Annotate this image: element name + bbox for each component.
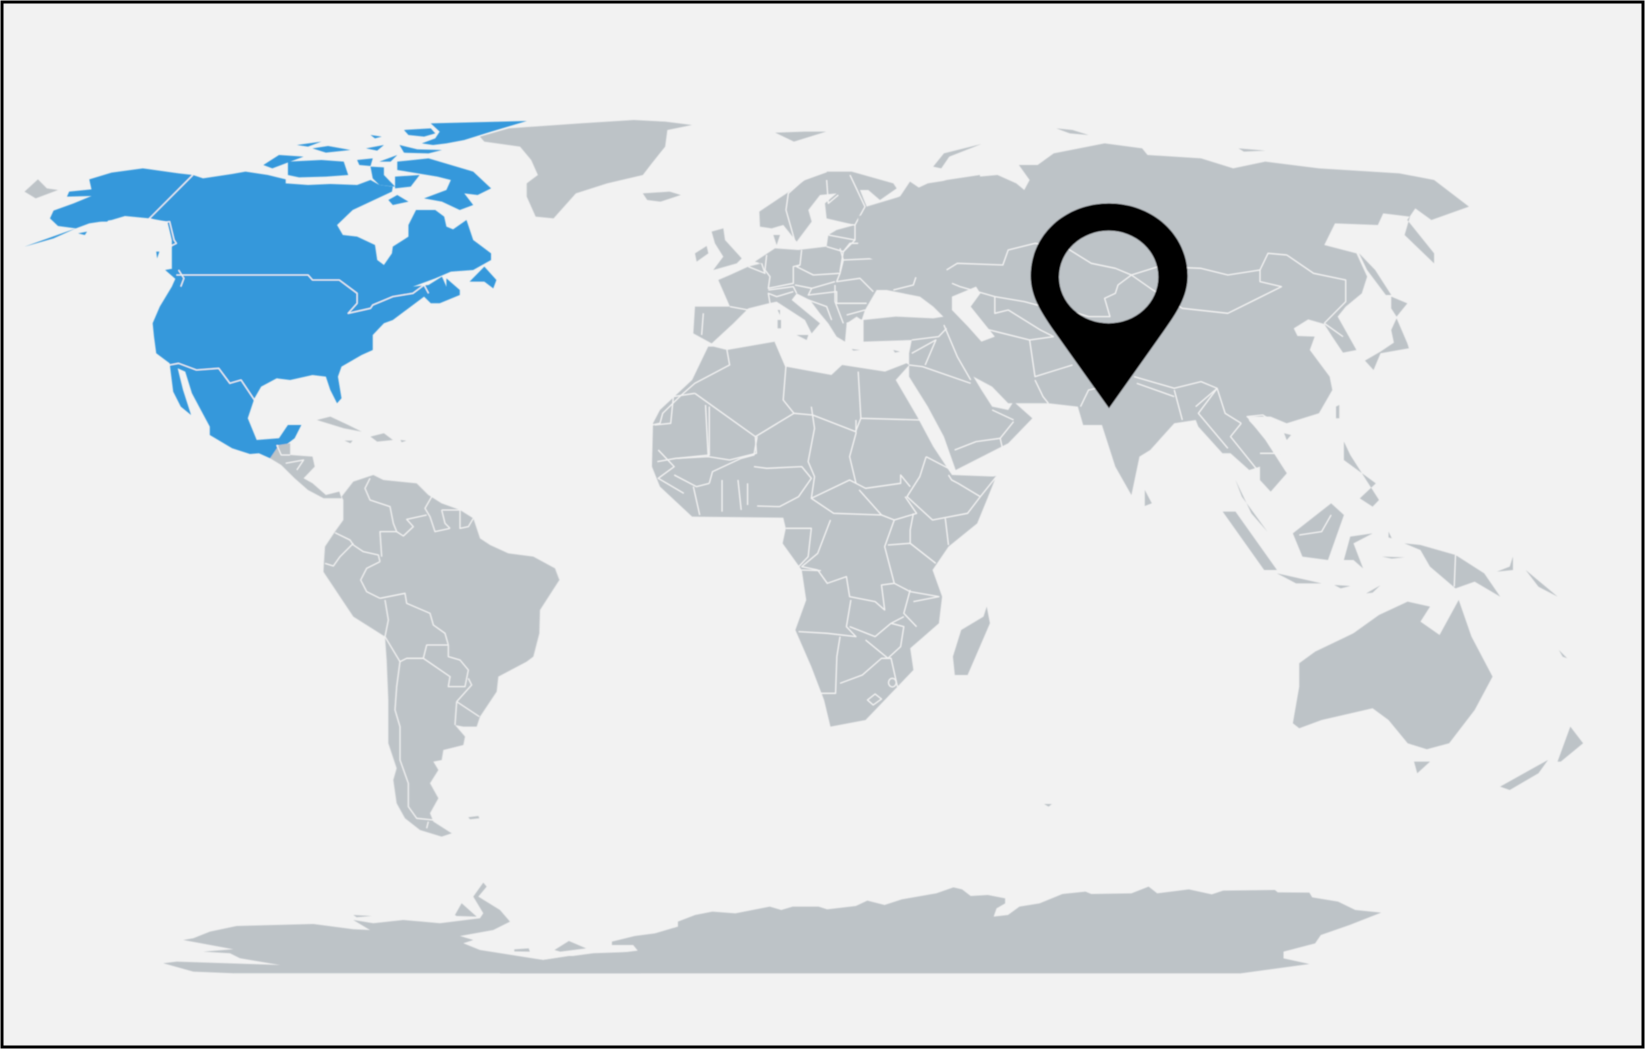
map: highlighted North America xyxy=(25,121,527,458)
inland sea: Caspian xyxy=(952,287,995,342)
map: Southeast Asia, Australia and Oceania xyxy=(1044,442,1583,807)
mainland Canada, USA, Mexico xyxy=(25,168,491,458)
arctic and coastal islands xyxy=(78,121,527,290)
map: Europe xyxy=(693,172,980,353)
map: South America xyxy=(323,475,559,837)
borders: Canada, USA, Mexico xyxy=(150,175,429,400)
Asian islands xyxy=(775,128,1409,506)
map: Africa xyxy=(652,342,996,727)
map: Antarctica xyxy=(163,883,1381,973)
Asian national borders xyxy=(909,243,1346,470)
map: Greenland, Iceland, Caribbean and Central America xyxy=(25,120,692,498)
world map xyxy=(25,120,1583,973)
icon: black map location pin xyxy=(1031,203,1188,408)
map: Asia xyxy=(775,128,1469,506)
